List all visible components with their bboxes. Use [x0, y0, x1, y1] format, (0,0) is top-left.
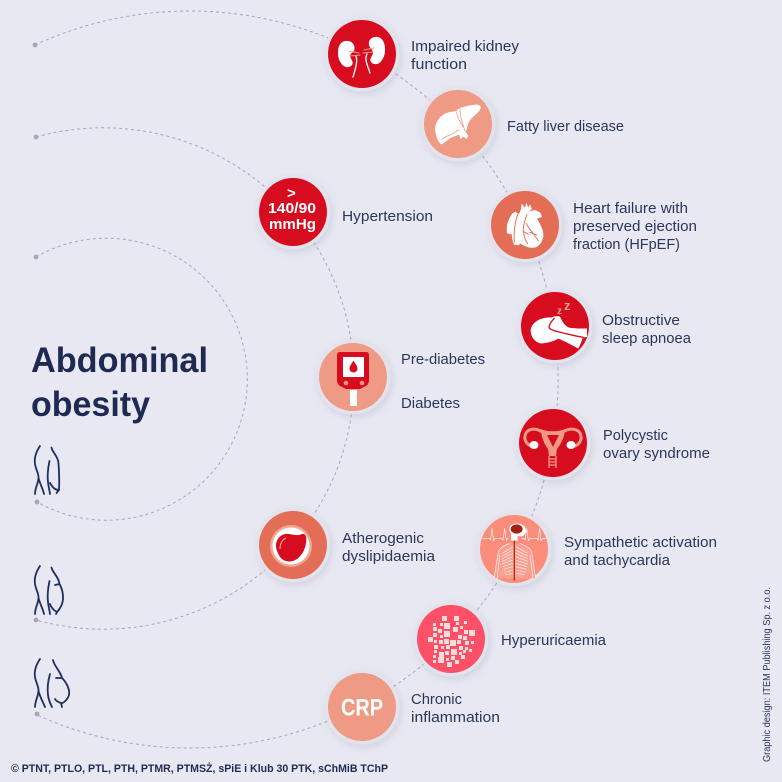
- circle: kidney: [324, 16, 400, 92]
- node: heart failure: [488, 188, 697, 262]
- icon: crp text: CRP: [341, 694, 383, 722]
- circle: hypertension: [256, 174, 330, 250]
- node: fatty liver disease: [420, 86, 624, 162]
- label: heart failure: fraction (HFpEF): [573, 236, 680, 253]
- icon: snore letters: z: [557, 306, 562, 317]
- label: heart failure: preserved ejection: [573, 218, 697, 235]
- label: diabetes: Diabetes: [401, 395, 460, 412]
- icon: sleeping head: [531, 316, 587, 349]
- label: obstructive sleep apnoea: Obstructive: [602, 312, 680, 329]
- title: Abdominal: [31, 341, 208, 380]
- circle: atherogenic: [256, 508, 330, 582]
- icon: body silhouette medium: [35, 566, 63, 614]
- label: polycystic ovary syndrome: ovary syndrome: [603, 445, 710, 462]
- label: impaired kidney function: function: [411, 56, 467, 73]
- circle: liver: [420, 86, 496, 162]
- label: polycystic ovary syndrome: Polycystic: [603, 427, 668, 444]
- node: atherogenic dyslipidaemia: [256, 508, 436, 582]
- node: chronic inflammation: [324, 670, 500, 744]
- title: obesity: [31, 385, 151, 424]
- label: sympathetic activation: and tachycardia: [564, 552, 671, 569]
- circle: ovary: [516, 406, 590, 480]
- icon: blood pressure value: 140/90: [268, 200, 316, 217]
- footer: source: © PTNT, PTLO, PTL, PTH, PTMR, PTMSŻ, sPiE i Klub 30 PTK, sChMiB TChP: [11, 762, 388, 775]
- node: hyperuricaemia: [414, 602, 607, 676]
- node: sympathetic activation: [476, 512, 717, 586]
- label: chronic inflammation: inflammation: [411, 709, 500, 726]
- label: obstructive sleep apnoea: sleep apnoea: [602, 330, 692, 347]
- circle: apnoea: [518, 288, 592, 364]
- icon: body silhouette large: [35, 659, 69, 707]
- icon: glucose meter: [337, 352, 369, 406]
- node: obstructive sleep apnoea: [518, 288, 692, 364]
- icon: kidneys: [338, 37, 385, 77]
- node: diabetes: [316, 340, 485, 414]
- label: chronic inflammation: Chronic: [411, 691, 462, 708]
- icon: snore letters: z: [564, 298, 571, 313]
- label: hypertension: Hypertension: [342, 208, 433, 225]
- middle dashed arc: [36, 128, 354, 629]
- inner dashed arc: [36, 238, 247, 520]
- icon: nervous system: [494, 524, 536, 581]
- icon: uterus: [525, 429, 581, 468]
- label: impaired kidney function: Impaired kidney: [411, 38, 520, 55]
- label: atherogenic dyslipidaemia: Atherogenic: [342, 530, 425, 547]
- icon: heart: [507, 202, 543, 248]
- circle: heart: [488, 188, 562, 262]
- node: impaired kidney function: [324, 16, 520, 92]
- label: sympathetic activation: Sympathetic activation: [564, 534, 717, 551]
- label: atherogenic dyslipidaemia: dyslipidaemia: [342, 548, 436, 565]
- icon: blood pressure value: mmHg: [269, 216, 316, 233]
- circle: crp: [324, 670, 400, 744]
- icon: blood pressure value: >: [287, 185, 296, 202]
- icon: urate crystals: [428, 616, 475, 667]
- icon: body silhouette slim: [35, 446, 59, 494]
- label: hyperuricaemia: Hyperuricaemia: [501, 632, 607, 649]
- label: fatty liver disease: Fatty liver disease: [507, 118, 624, 135]
- circle: glucose meter: [316, 340, 390, 414]
- circle: sympathetic: [476, 512, 552, 586]
- arc end dots: [33, 43, 39, 716]
- label: heart failure: Heart failure with: [573, 200, 688, 217]
- node: hypertension: [256, 174, 433, 250]
- outer dashed arc: [35, 11, 558, 748]
- icon: ecg line: [482, 528, 546, 541]
- credit: graphic design: Graphic design: ITEM Publishing Sp. z o.o.: [762, 587, 773, 762]
- node: polycystic ovary syndrome: [516, 406, 710, 480]
- icon: liver: [435, 105, 481, 144]
- icon: artery cross-section: [270, 525, 312, 567]
- circle: hyperuricaemia: [414, 602, 488, 676]
- label: pre-diabetes: Pre-diabetes: [401, 351, 485, 368]
